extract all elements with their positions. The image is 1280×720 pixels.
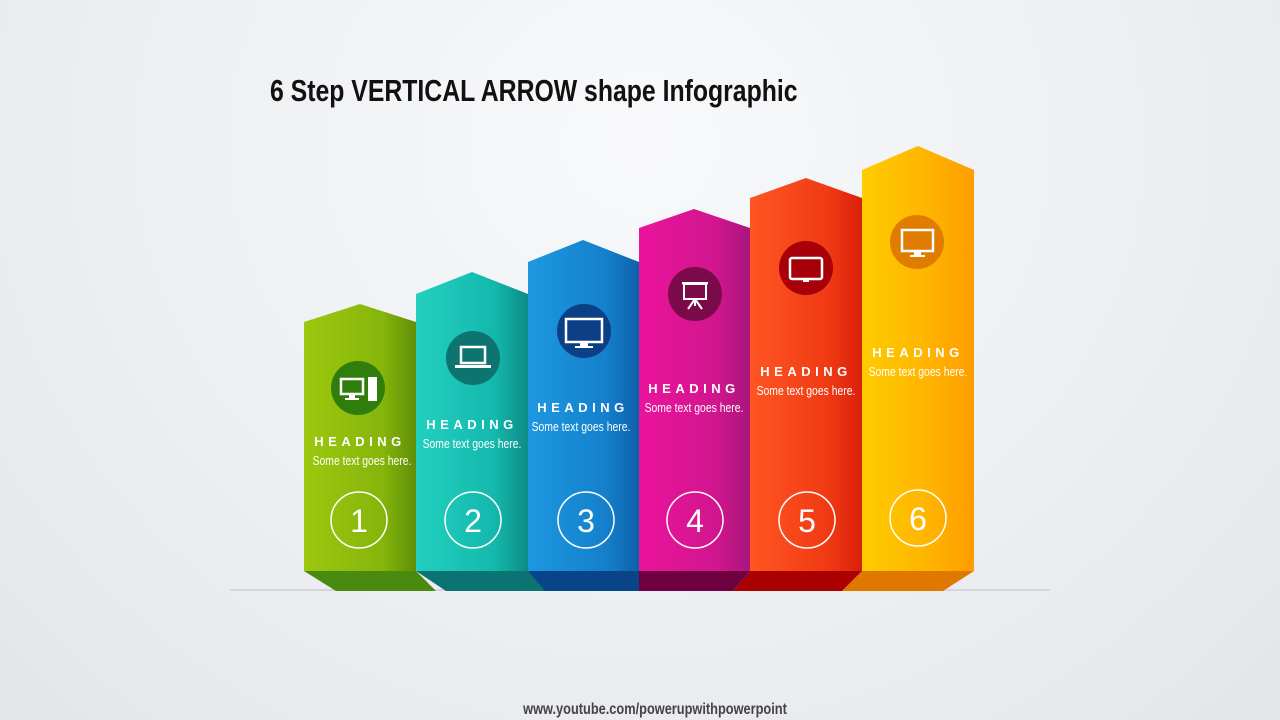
number 1	[331, 492, 387, 548]
icon: laptop	[446, 331, 500, 385]
footer url: www.youtube.com/powerupwithpowerpoint	[522, 701, 787, 718]
text block 6	[869, 345, 967, 379]
text block 4: Some text goes here.	[645, 401, 743, 415]
text block 6: Some text goes here.	[869, 365, 967, 379]
number 5	[779, 492, 835, 548]
text block 2: HEADING	[426, 417, 518, 432]
text block 2: Some text goes here.	[423, 437, 521, 451]
number 6: 6	[909, 501, 927, 537]
text block 1: Some text goes here.	[313, 454, 411, 468]
bar 1	[304, 304, 416, 571]
text block 1	[313, 434, 411, 468]
bar 5	[750, 178, 862, 571]
text block 6: HEADING	[872, 345, 964, 360]
bar 6	[862, 146, 974, 571]
text block 3	[532, 400, 630, 434]
icon: monitor	[890, 215, 944, 269]
number 3	[558, 492, 614, 548]
text block 4: HEADING	[648, 381, 740, 396]
text block 4	[645, 381, 743, 415]
icon: desktop computer	[331, 361, 385, 415]
number 4	[667, 492, 723, 548]
number 6	[890, 490, 946, 546]
icon: presentation board	[668, 267, 722, 321]
bar 4	[639, 209, 750, 571]
bar 2	[416, 272, 528, 571]
text block 2	[423, 417, 521, 451]
text block 5	[757, 364, 855, 398]
number 2	[445, 492, 501, 548]
text block 3: HEADING	[537, 400, 629, 415]
icon: tablet	[779, 241, 833, 295]
text block 3: Some text goes here.	[532, 420, 630, 434]
text block 1: HEADING	[314, 434, 406, 449]
number 3: 3	[577, 503, 595, 539]
number 2: 2	[464, 503, 482, 539]
icon: monitor	[557, 304, 611, 358]
text block 5: HEADING	[760, 364, 852, 379]
bottom strips	[304, 571, 974, 591]
bar 3	[528, 240, 639, 571]
title: 6 Step VERTICAL ARROW shape Infographic	[270, 73, 798, 108]
number 5: 5	[798, 503, 816, 539]
number 4: 4	[686, 503, 704, 539]
number 1: 1	[350, 503, 368, 539]
text block 5: Some text goes here.	[757, 384, 855, 398]
